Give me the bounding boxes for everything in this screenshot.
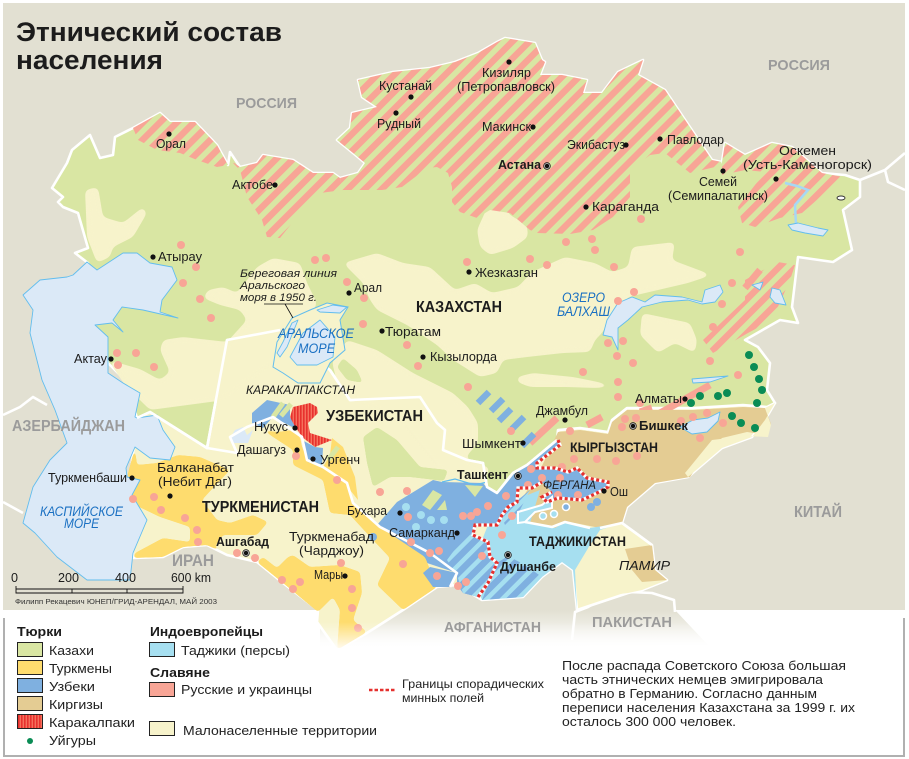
city labels: Джамбул: [536, 404, 588, 418]
note on ethnic Germans: [562, 658, 856, 729]
scale bar: 400: [115, 571, 136, 585]
blue dashes: Uzbeks in south Kazakhstan: [478, 392, 534, 446]
neighbouring country labels: АЗЕРБАЙДЖАН: [12, 416, 125, 435]
city labels: Семей: [699, 175, 737, 189]
city labels: Макинск: [482, 120, 532, 134]
blue blob by Turkmen border: [423, 567, 457, 587]
city labels: Караганда: [592, 200, 659, 214]
neighbouring country labels: [12, 57, 842, 636]
capital markers: [243, 163, 636, 558]
legend: Turkic group: Уйгуры: [49, 733, 96, 748]
city labels: Бухара: [347, 504, 387, 518]
city labels: Кизиляр: [482, 66, 531, 80]
annotation: 1950 Aral shoreline: Аральского: [239, 280, 305, 292]
legend: Slavic group: [150, 665, 312, 697]
city labels: Актобе: [232, 178, 273, 192]
note on ethnic Germans: После распада Советского Союза большая: [562, 658, 846, 673]
legend: Turkic group: Киргизы: [49, 697, 103, 712]
city labels: Шымкент: [462, 437, 521, 451]
Caspian Sea: [23, 253, 178, 580]
city labels: Ош: [610, 485, 628, 499]
annotation: 1950 Aral shoreline: [239, 268, 337, 318]
city labels: Нукус: [254, 420, 288, 434]
note on ethnic Germans: осталось 300 000 человек.: [562, 714, 736, 729]
pale area, east Kyrgyzstan: [685, 403, 775, 477]
striped zone: Taldykorgan: [703, 262, 795, 353]
water labels: МОРЕ: [64, 516, 100, 531]
city labels: Орал: [156, 137, 186, 151]
map background: [3, 3, 905, 610]
land: Uzbekistan, Turkmenistan, Kyrgyzstan, Tajikistan: [130, 330, 775, 650]
region labels: КАРАКАЛПАКСТАН: [246, 385, 356, 397]
Karakalpak territory: [290, 403, 332, 447]
legend: Turkic group: Каракалпаки: [49, 715, 135, 730]
legend: Turkic group: Туркмены: [49, 661, 112, 676]
legend: Slavic group: Славяне: [150, 665, 210, 680]
neighbouring country labels: КИТАЙ: [794, 502, 842, 521]
faded neighbouring land below the map: [320, 610, 708, 648]
yellow band, Uzbek side of the river: [323, 438, 358, 500]
city labels: (Чарджоу): [299, 544, 364, 558]
striped zone: Aktobe: [230, 155, 343, 238]
neighbouring country labels: РОССИЯ: [768, 57, 830, 74]
fade over land at map bottom: [300, 622, 720, 652]
region labels: ФЕРГАНА: [543, 480, 596, 492]
city labels: Туркменбаши: [48, 471, 127, 485]
annotation: 1950 Aral shoreline: Береговая линия: [240, 268, 337, 280]
Tajik dots: [402, 503, 558, 531]
Uyghur dots: [687, 351, 766, 432]
water labels: КАСПИЙСКОЕ: [40, 503, 124, 519]
note on ethnic Germans: часть этнических немцев эмигрировала: [562, 672, 824, 687]
water labels: МОРЕ: [298, 341, 336, 356]
city labels: Ташкент: [457, 468, 508, 482]
city labels: Кызылорда: [430, 350, 497, 364]
Sarykamysh lake: [230, 427, 253, 443]
salmon stripes near Dzhambul and Almaty: [530, 270, 760, 443]
Lake Balkhash: [603, 285, 723, 350]
Tajik territory: [470, 490, 622, 610]
city labels: Туркменабад: [289, 530, 375, 544]
neighbouring country labels: ПАКИСТАН: [592, 614, 672, 631]
scale bar: [11, 571, 211, 593]
land: Kazakhstan: [52, 38, 860, 493]
legend: minefield borders: Границы спорадических: [402, 677, 544, 691]
city labels: Оскемен: [779, 144, 836, 158]
water labels: ОЗЕРО: [562, 290, 605, 305]
city labels: Самарканд: [389, 526, 456, 540]
Aral Sea 1950 shoreline: [273, 303, 348, 383]
city labels: Алматы: [635, 392, 682, 406]
striped zone: Semey and Oskemen: [722, 143, 843, 227]
legend: minefield borders: [369, 677, 544, 705]
legend: Indo-European group: [150, 624, 290, 658]
Turkmen strip along Amu Darya: [263, 430, 437, 610]
small lakes: [680, 196, 845, 434]
city labels: Актау: [74, 352, 108, 366]
water labels: [40, 290, 611, 531]
internal white borders: [137, 330, 652, 587]
sparsely populated territories in Kazakhstan: [85, 187, 712, 490]
city labels: Рудный: [377, 117, 421, 131]
country labels: ТУРКМЕНИСТАН: [202, 499, 319, 516]
Uzbek dots: [369, 498, 601, 541]
city labels: Павлодар: [667, 133, 724, 147]
city labels: Ашгабад: [216, 535, 269, 549]
neighbouring country labels: АФГАНИСТАН: [444, 619, 541, 636]
legend: Turkic group: Тюрки: [17, 624, 62, 639]
city labels: (Небит Даг): [158, 475, 232, 489]
city labels: Ургенч: [320, 453, 360, 467]
Zaysan lake and Irtysh: [785, 183, 828, 236]
city labels: (Усть-Каменогорск): [743, 158, 872, 172]
legend: Turkic group: Узбеки: [49, 679, 95, 694]
legend: Indo-European group: Таджики (персы): [181, 643, 290, 658]
neighbouring borders: [3, 153, 905, 640]
water labels: БАЛХАШ: [557, 304, 611, 319]
legend: Turkic group: [17, 624, 135, 748]
region labels: ПАМИР: [619, 558, 670, 573]
country labels: [202, 299, 658, 549]
city labels: Жезказган: [475, 266, 538, 280]
city labels: Тюратам: [385, 325, 441, 339]
Uzbek territory: [377, 440, 608, 597]
legend: Slavic group: Русские и украинцы: [181, 682, 312, 697]
Kyrgyz territory: [518, 407, 771, 530]
title: Этнический состав: [16, 17, 282, 47]
Karakalpak Uzbek patch: [252, 400, 298, 430]
sporadic minefield borders: [473, 440, 608, 597]
legend: sparsely populated: Малонаселенные территории: [183, 723, 377, 738]
legend: Indo-European group: Индоевропейцы: [150, 624, 263, 639]
neighbouring country labels: РОССИЯ: [236, 95, 297, 112]
Russian and Ukrainian dots: [113, 215, 744, 632]
green patches in Fergana approach: [422, 485, 483, 510]
Pamir pale and tan: [588, 540, 667, 597]
city labels: Мары: [314, 568, 343, 582]
Uzbek and Tajik mixed stripes: [447, 490, 542, 600]
credit: Филипп Рекацевич ЮНЕП/ГРИД-АРЕНДАЛ, МАЙ 2003: [15, 597, 217, 606]
country labels: КАЗАХСТАН: [416, 299, 502, 316]
city labels: Дашагуз: [237, 443, 286, 457]
city labels: (Семипалатинск): [668, 189, 768, 203]
scale bar: 200: [58, 571, 79, 585]
note on ethnic Germans: обратно в Германию. Согласно данным: [562, 686, 817, 701]
legend: Turkic group: Казахи: [49, 643, 94, 658]
striped zone: Oral: [133, 113, 228, 167]
city labels: Арал: [354, 281, 382, 295]
city labels: Астана: [498, 158, 542, 172]
country labels: УЗБЕКИСТАН: [326, 408, 423, 425]
Turkmen territory: [127, 447, 367, 650]
green patches: [337, 358, 448, 487]
Tashkent reservoir: [442, 479, 487, 485]
Aral Sea: [277, 305, 347, 365]
Tajik enclaves: [518, 497, 552, 523]
city labels: [48, 66, 872, 582]
note on ethnic Germans: переписи населения Казахстана за 1999 г. их: [562, 700, 856, 715]
city labels: Балканабат: [157, 461, 234, 475]
city labels: Бишкек: [639, 419, 689, 433]
city labels: Душанбе: [500, 560, 556, 574]
annotation: 1950 Aral shoreline: моря в 1950 г.: [240, 292, 317, 304]
legend: minefield borders: минных полей: [402, 691, 484, 705]
Kazakh stripes in Karakalpakstan: [273, 403, 338, 460]
city markers: [108, 59, 779, 579]
region labels: [246, 385, 670, 573]
title: [16, 17, 282, 75]
water labels: АРАЛЬСКОЕ: [277, 326, 355, 341]
country labels: КЫРГЫЗСТАН: [570, 439, 658, 455]
legend frame: [4, 618, 904, 756]
scale bar: 600 km: [171, 571, 211, 585]
city labels: Атырау: [158, 250, 203, 264]
city labels: Экибастуз: [567, 138, 625, 152]
country labels: ТАДЖИКИСТАН: [529, 533, 626, 549]
neighbouring country labels: ИРАН: [172, 551, 214, 570]
city labels: Кустанай: [379, 79, 432, 93]
title: населения: [16, 45, 163, 75]
striped zone: north Kazakhstan, Russians and Ukrainians: [337, 38, 722, 234]
Urgench Uzbek patch: [302, 440, 323, 467]
city labels: (Петропавловск): [457, 80, 555, 94]
scale bar: 0: [11, 571, 18, 585]
